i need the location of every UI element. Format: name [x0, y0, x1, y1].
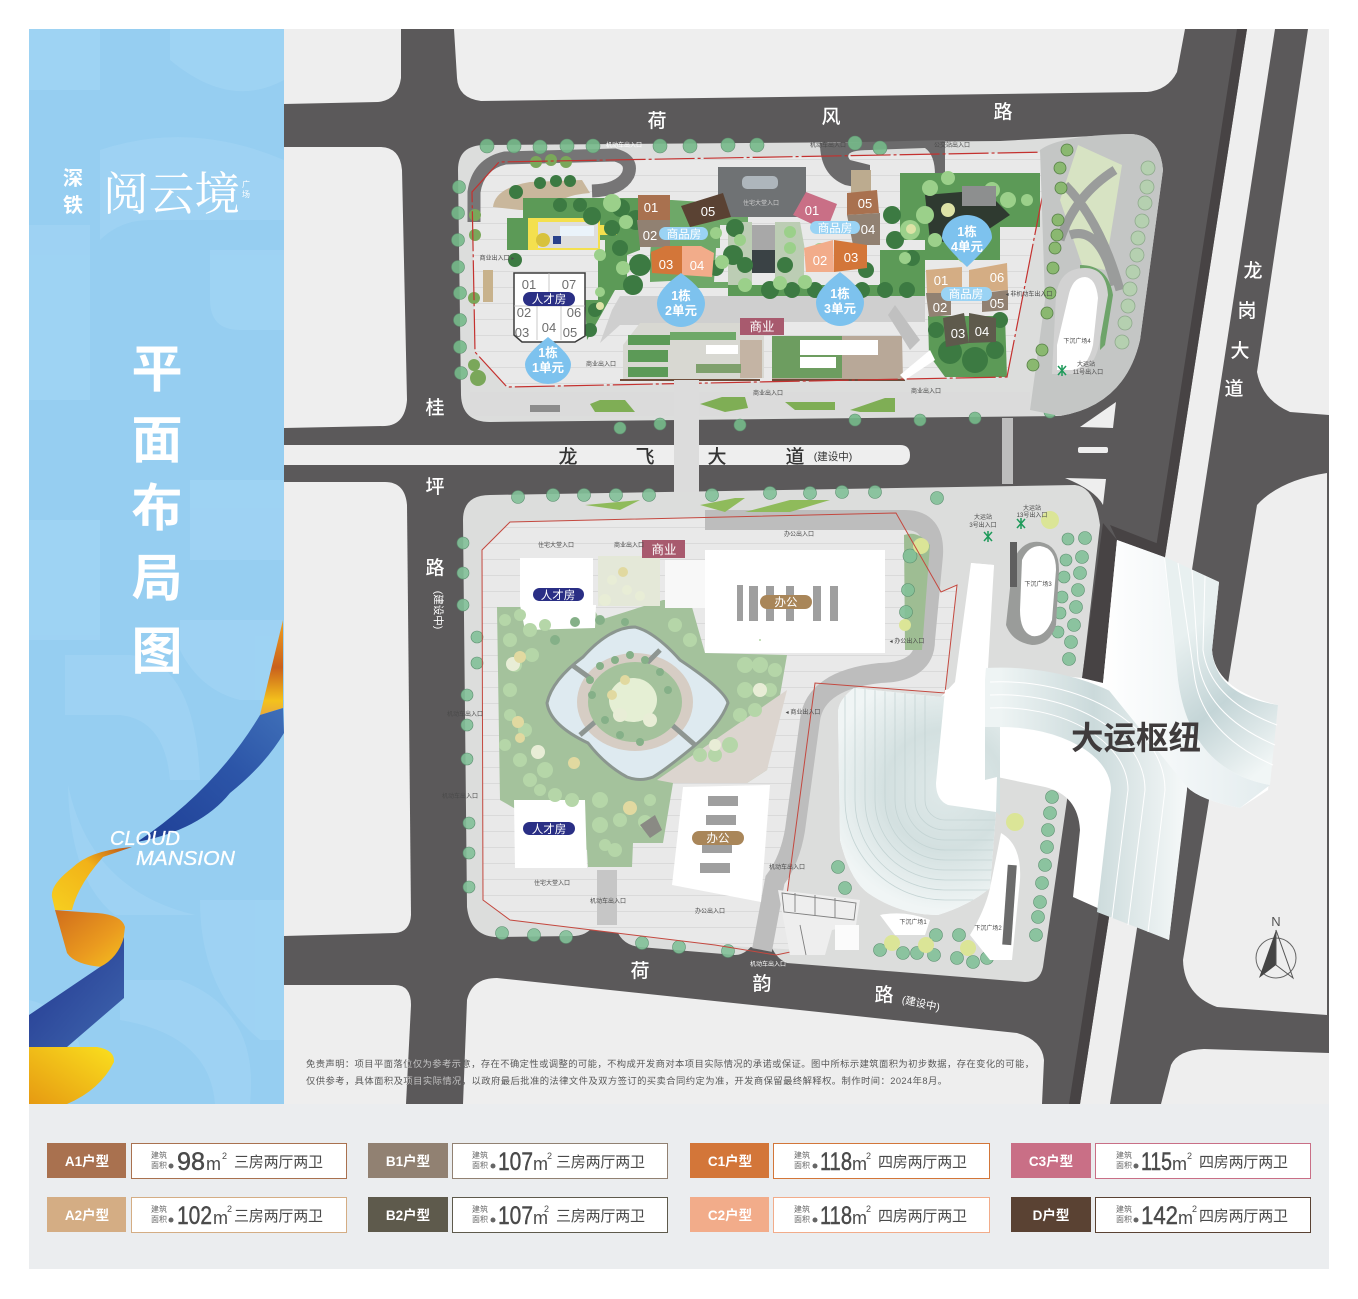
- legend: A2: m: [213, 1208, 228, 1228]
- wing lines: [1178, 563, 1277, 765]
- red line boundary south: [482, 513, 957, 955]
- entrance labels: [442, 141, 1103, 968]
- legend: C3: C3户型: [1029, 1153, 1073, 1169]
- left panel: blue brand column: [29, 29, 284, 1104]
- unit numbers: 05: [563, 325, 577, 340]
- pill: talent housing north: [533, 588, 584, 602]
- road shadow by hub: [1082, 523, 1117, 683]
- legend: C1: m: [852, 1154, 867, 1174]
- sand strip: [483, 270, 493, 302]
- road names: 路: [993, 101, 1013, 123]
- pill: office south: 办公: [706, 831, 730, 845]
- unit B2 03: 03: [951, 326, 965, 341]
- road names: 荷: [647, 110, 667, 132]
- commercial badge south: [642, 540, 685, 558]
- band lines: [990, 682, 1165, 932]
- entrance labels: 机动车出入口: [447, 710, 483, 718]
- legend: C3: 建筑: [1116, 1150, 1132, 1160]
- legend: C1: 2: [866, 1151, 871, 1161]
- sky garden glass: [547, 627, 728, 780]
- north strip planters: [585, 498, 830, 512]
- entrance labels: 机动车出入口: [606, 141, 642, 149]
- legend: B2: m: [533, 1208, 548, 1228]
- legend: A2: A2户型: [65, 1207, 109, 1223]
- talent building south: [514, 800, 587, 868]
- entrance labels: 大运站: [1077, 360, 1095, 368]
- icon: metro marks: [984, 365, 1066, 542]
- icon: compass: N: [1271, 914, 1281, 929]
- legend: D: 2: [1192, 1204, 1197, 1214]
- pin: unit 1: 1栋: [538, 345, 558, 360]
- legend: B2: 2: [544, 1204, 549, 1214]
- unit B1 02: 02: [643, 228, 657, 243]
- traffic islands: [1065, 402, 1116, 505]
- entrance labels: 3号出入口: [969, 521, 997, 529]
- entrance labels: 商业出入口: [614, 541, 644, 549]
- road names: 桂: [425, 397, 445, 419]
- brand text: cloud mansion: [110, 830, 236, 866]
- entrance labels: ◂ 办公出入口: [890, 637, 924, 645]
- courtyard garden: [497, 600, 787, 867]
- entrance labels: 机动车出入口: [769, 863, 805, 871]
- entrance labels: 商业出入口: [911, 387, 941, 395]
- city block: top middle: [454, 29, 1185, 101]
- unit B1 02: 02: [933, 300, 947, 315]
- legend: B1: m: [533, 1154, 548, 1174]
- legend: B2: B2户型: [386, 1207, 430, 1223]
- road names: 飞: [635, 447, 655, 468]
- pin: unit 2: 2单元: [665, 303, 697, 318]
- ribbon: upper orange: [260, 620, 283, 715]
- ring cuts: [572, 650, 695, 745]
- street trees north: [452, 136, 1056, 434]
- street trees south: [457, 486, 1092, 968]
- pin: unit 4: 1栋: [957, 224, 977, 239]
- legend: D: [1011, 1197, 1310, 1232]
- road names: 路: [425, 557, 445, 579]
- entrance labels: ◂ 非机动车出入口: [1006, 290, 1052, 298]
- road names: 坪: [425, 476, 445, 498]
- entrance labels: 办公出入口: [695, 907, 725, 915]
- legend: D: 面积: [1116, 1214, 1132, 1224]
- legend: C2: m: [852, 1208, 867, 1228]
- building plate: [514, 273, 585, 342]
- longfei avenue strip: [284, 445, 910, 465]
- logo: shenzhen metro: 铁: [63, 194, 83, 217]
- sunken plaza 1: [778, 890, 930, 955]
- entrance labels: 大运站: [974, 513, 992, 521]
- legend panel: [29, 1104, 1329, 1269]
- road names: 大: [1230, 340, 1250, 362]
- commercial podium east: [772, 305, 935, 380]
- green belts: [507, 173, 1040, 377]
- legend: C2: [690, 1197, 990, 1232]
- pill: commercial housing: 商品房: [949, 287, 983, 301]
- unit C2 04: 04: [690, 258, 704, 273]
- yellow trees: [884, 511, 1059, 956]
- interior lines: [514, 273, 585, 340]
- legend: A2: 面积: [151, 1214, 167, 1224]
- hedge trees west: [468, 154, 572, 386]
- pin: unit 1: 1单元: [532, 360, 564, 375]
- hub label: 大运枢纽: [1071, 720, 1201, 756]
- north white strip: [937, 563, 994, 780]
- unit B1 04: 04: [861, 222, 875, 237]
- units: 1栋3单元: [793, 190, 880, 326]
- pin: unit 2: 1栋: [671, 288, 691, 303]
- unit numbers: 06: [567, 305, 581, 320]
- city block: left middle: [284, 147, 407, 428]
- legend: C2: 四房两厅两卫: [878, 1208, 967, 1225]
- unit B2 04: 04: [975, 324, 989, 339]
- sunken plaza 3: [1006, 542, 1059, 645]
- courtyard trees south: [499, 567, 782, 857]
- panel title: [131, 341, 183, 680]
- legend: C1: [690, 1143, 990, 1178]
- commercial badge north: [740, 318, 784, 335]
- legend: C3: 四房两厅两卫: [1199, 1154, 1288, 1171]
- entrance labels: 商业出入口: [753, 389, 783, 397]
- legend: C1: 建筑: [794, 1150, 810, 1160]
- legend: B1: B1户型: [386, 1153, 430, 1169]
- playground: [528, 218, 617, 250]
- entrance labels: 大运站: [1023, 504, 1041, 512]
- east band stripes: [985, 668, 1187, 940]
- entrance labels: 机动车出入口: [590, 897, 626, 905]
- road names: 路: [874, 984, 894, 1006]
- legend: B1: 107: [498, 1148, 533, 1176]
- annex: [665, 560, 705, 608]
- unit numbers: 02: [517, 305, 531, 320]
- road names: 龙: [1243, 260, 1263, 282]
- commercial badge south: 商业: [651, 542, 677, 557]
- legend: A1: 面积: [151, 1160, 167, 1170]
- north plot: [452, 134, 1163, 540]
- grey pavilion: [640, 815, 662, 838]
- logo: shenzhen metro: 深: [63, 167, 83, 190]
- east pocket park: [1027, 134, 1163, 416]
- legend: C3: m: [1172, 1154, 1187, 1174]
- hub top shadow: [1110, 525, 1164, 557]
- dark garden: [925, 190, 1010, 245]
- sand lawn: [493, 180, 590, 210]
- legend: B2: 建筑: [472, 1204, 488, 1214]
- units: 1栋2单元: [637, 193, 731, 327]
- entrance labels: 公交站出入口: [934, 141, 970, 149]
- legend: A2: [47, 1197, 346, 1232]
- pin: unit 3: [816, 272, 864, 326]
- road names: (建设中): [814, 450, 852, 463]
- red line boundary north: [472, 152, 1051, 387]
- entrance labels: 13号出入口: [1017, 511, 1047, 519]
- unit A2 01: 01: [934, 273, 948, 288]
- city block: right middle: [1183, 473, 1327, 1015]
- disclaimer: 免责声明：项目平面落位仅为参考示意，存在不确定性或调整的可能，不构成开发商对本项目实际情况的承诺或保证。图中所标示建筑面积为初步数据，存在变化的可能，: [306, 1058, 1034, 1069]
- entrance labels: 办公出入口: [784, 530, 814, 538]
- pill: office north: 办公: [774, 595, 798, 609]
- road names: 风: [821, 107, 841, 128]
- pill: talent housing south: [523, 822, 575, 836]
- legend: C1: 118: [820, 1148, 852, 1176]
- map background with road network: [284, 29, 1329, 1104]
- pill: commercial housing: 商品房: [818, 221, 852, 235]
- commercial podium west: [620, 323, 764, 382]
- city block: top left: [284, 29, 401, 104]
- legend: A1: 98: [177, 1148, 205, 1176]
- brand text: cloud mansion: MANSION: [136, 848, 236, 870]
- road names: [425, 101, 1263, 1014]
- inner road band: [600, 296, 925, 343]
- legend: A1: m: [206, 1154, 221, 1174]
- tan plaza: [657, 690, 787, 783]
- unit C3 01: 01: [805, 203, 819, 218]
- small garden: [598, 556, 660, 606]
- pin: unit 4: [942, 215, 992, 267]
- legend: A1: 2: [222, 1151, 227, 1161]
- driveway east bay: [820, 140, 945, 190]
- pin: unit 3: 1栋: [830, 286, 850, 301]
- legend: B2: 107: [498, 1202, 533, 1230]
- entrance labels: 住宅大堂入口: [538, 541, 574, 549]
- legend: C1: C1户型: [708, 1153, 752, 1169]
- road names: 道: [785, 446, 805, 468]
- pill: commercial housing: 商品房: [667, 227, 701, 241]
- panel title: 平: [131, 341, 183, 398]
- sunken plaza 3: 下沉广场3: [1024, 580, 1052, 588]
- lower promenade: [470, 392, 1030, 416]
- road dark edge: [1069, 29, 1247, 1104]
- ribbon: upper blue: [137, 708, 284, 842]
- legend: A2: 2: [227, 1204, 232, 1214]
- driveway west: [474, 155, 629, 222]
- garden ring: [577, 653, 693, 751]
- legend: C3: 2: [1187, 1151, 1192, 1161]
- city block: bottom right: [1161, 1049, 1329, 1104]
- ribbon: orange fold: [55, 910, 125, 967]
- legend: D: 142: [1141, 1202, 1178, 1230]
- logo: sub-label: 场: [242, 190, 250, 199]
- pin: unit 2: [657, 273, 705, 327]
- west arena stripes: [830, 680, 1000, 920]
- unit numbers: 03: [515, 325, 529, 340]
- pill: talent housing north: 人才房: [541, 588, 575, 602]
- panel title: 布: [131, 480, 183, 537]
- hub silhouette: [838, 540, 1278, 940]
- courtyard trees: [508, 171, 1033, 373]
- pill: talent housing south: 人才房: [532, 822, 566, 836]
- crosswalk: [1002, 418, 1013, 484]
- brand text: cloud mansion: CLOUD: [110, 828, 180, 850]
- road names: (建设中): [901, 993, 941, 1014]
- sunken plaza 2: 下沉广场2: [974, 924, 1002, 932]
- unit A1 01: 01: [644, 200, 658, 215]
- sunken plaza 4: [1080, 265, 1113, 350]
- legend: C1: 面积: [794, 1160, 810, 1170]
- ribbon: yellow fold: [52, 847, 132, 910]
- grey green shrub: [962, 186, 996, 206]
- ne wing curve: [1165, 557, 1278, 785]
- south plot: [457, 485, 1164, 982]
- ribbon: lower yellow: [29, 1047, 114, 1104]
- entrance labels: 住宅大堂入口: [534, 879, 570, 887]
- legend: B1: [368, 1143, 668, 1178]
- legend: C3: [1011, 1143, 1310, 1178]
- logo: sub-label: [242, 179, 250, 199]
- sunken plaza 2: [970, 833, 1020, 960]
- road names: 荷: [630, 960, 650, 982]
- legend: A1: 三房两厅两卫: [234, 1154, 323, 1171]
- legend: C2: 面积: [794, 1214, 810, 1224]
- unit numbers: 01: [522, 277, 536, 292]
- legend: C2: C2户型: [708, 1207, 752, 1223]
- legend: B2: 三房两厅两卫: [556, 1208, 645, 1225]
- panel title: 局: [131, 550, 183, 607]
- city block: left lower: [284, 482, 411, 936]
- service island: [904, 534, 930, 650]
- road names: 岗: [1237, 300, 1257, 322]
- pin: unit 4: 4单元: [951, 239, 983, 254]
- units: 1栋1单元 talent housing: [514, 273, 585, 384]
- legend: A1: A1户型: [65, 1153, 109, 1169]
- legend: C3: 115: [1141, 1148, 1172, 1176]
- entrance labels: 机动车出入口: [442, 792, 478, 800]
- dayun hub canopy: [778, 540, 1278, 960]
- central plaza: [718, 167, 871, 273]
- road names: 道: [1224, 378, 1244, 400]
- unit C1 03: 03: [844, 250, 858, 265]
- legend: C2: 118: [820, 1202, 852, 1230]
- legend: D: D户型: [1033, 1207, 1069, 1223]
- talent building north: [520, 558, 596, 630]
- legend: A2: 三房两厅两卫: [234, 1208, 323, 1225]
- pill: office north: [760, 595, 812, 609]
- legend: B1: 三房两厅两卫: [556, 1154, 645, 1171]
- unit C2 02: 02: [813, 253, 827, 268]
- legend: D: m: [1178, 1208, 1193, 1228]
- legend: B1: 面积: [472, 1160, 488, 1170]
- entrance labels: 住宅大堂入口: [743, 199, 779, 207]
- unit D 05: 05: [701, 204, 715, 219]
- legend: B1: 2: [547, 1151, 552, 1161]
- east pocket park: 下沉广场4: [1063, 337, 1091, 345]
- road names: (建设中): [432, 591, 445, 629]
- ring road: [705, 520, 933, 950]
- road names: 龙: [558, 446, 578, 468]
- entrance labels: 机动车出入口: [810, 141, 846, 149]
- legend: C1: 四房两厅两卫: [878, 1154, 967, 1171]
- panel title: 图: [131, 623, 183, 680]
- entrance labels: ◂ 商业出入口: [786, 708, 820, 716]
- pin: unit 3: 3单元: [824, 301, 856, 316]
- legend: D: 建筑: [1116, 1204, 1132, 1214]
- logo: yueyunjing: 阅云境: [103, 169, 240, 220]
- pill: office south: [692, 831, 744, 845]
- legend: C3: 面积: [1116, 1160, 1132, 1170]
- unit numbers: [515, 277, 581, 340]
- promenade planters: [530, 397, 895, 412]
- city block: bottom middle: [463, 978, 1044, 1104]
- road median: [1080, 29, 1275, 1104]
- unit A1 05: 05: [858, 196, 872, 211]
- entrance labels: 11号出入口: [1073, 368, 1103, 376]
- panel title: 面: [131, 412, 183, 469]
- unit numbers: 04: [542, 320, 556, 335]
- disclaimer: 仅供参考，具体面积及项目实际情况，以政府最后批准的法律文件及双方签订的买卖合同约定为准，开发商保留最终解释权。制作时间：2024年8月。: [306, 1075, 947, 1086]
- unit numbers: 07: [562, 277, 576, 292]
- west lane: [597, 870, 617, 925]
- unit B1 05: 05: [990, 296, 1004, 311]
- panel pattern: [29, 29, 284, 1104]
- legend: C2: 建筑: [794, 1204, 810, 1214]
- ribbon: lower blue: [29, 937, 124, 1047]
- legend: B2: 面积: [472, 1214, 488, 1224]
- white inner l: [936, 680, 997, 812]
- legend: A1: 建筑: [151, 1150, 167, 1160]
- legend: D: 四房两厅两卫: [1199, 1208, 1288, 1225]
- road names: 韵: [752, 973, 772, 995]
- unit C1 03: 03: [659, 257, 673, 272]
- entrance labels: 商业出入口 ▸: [480, 254, 514, 262]
- road names: 大: [707, 446, 727, 468]
- legend: A1: [47, 1143, 346, 1178]
- logo: shenzhen metro: [63, 167, 83, 217]
- office 2: [672, 785, 770, 902]
- pill: talent housing: 人才房: [532, 292, 566, 306]
- office 1: [666, 550, 885, 653]
- legend: A2: 102: [177, 1202, 212, 1230]
- bridge: [674, 380, 699, 540]
- logo: sub-label: 广: [242, 179, 250, 189]
- ne wing: [1103, 540, 1270, 808]
- legend: B2: [368, 1197, 668, 1232]
- city block: bottom left: [284, 985, 411, 1104]
- pin: unit 1: [525, 337, 571, 384]
- disclaimer: [306, 1058, 1034, 1086]
- city block: top right: [1257, 29, 1329, 415]
- legend: A2: 建筑: [151, 1204, 167, 1214]
- legend: B1: 建筑: [472, 1150, 488, 1160]
- icon: compass: [1256, 914, 1296, 978]
- commercial badge north: 商业: [749, 319, 775, 334]
- entrance labels: 商业出入口: [586, 360, 616, 368]
- legend: C2: 2: [866, 1204, 871, 1214]
- sunken plaza 1: 下沉广场1: [899, 918, 927, 926]
- units: 1栋4单元: [926, 215, 1008, 347]
- entrance labels: 机动车出入口: [750, 960, 786, 968]
- unit A2 06: 06: [990, 270, 1004, 285]
